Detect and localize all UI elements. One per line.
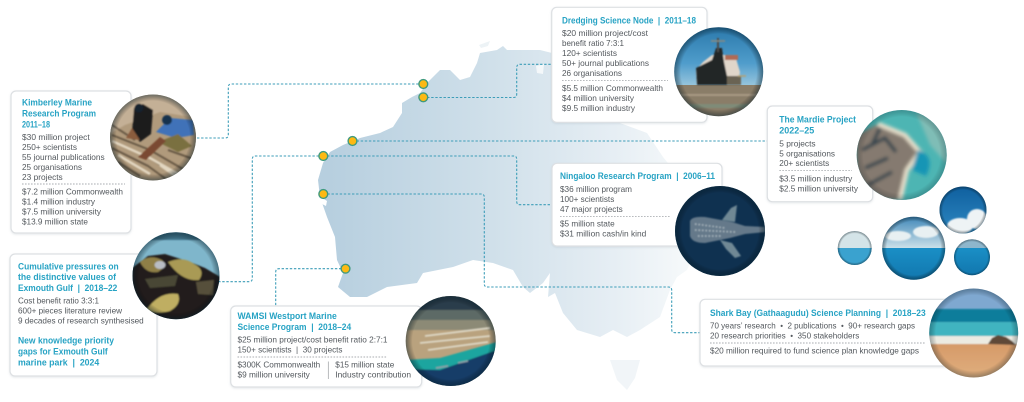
heading: Shark Bay: Shark Bay (Gathaagudu) Science Planning | 2018–23 bbox=[710, 308, 926, 318]
funding: Mardie: $2.5 million university bbox=[779, 183, 859, 193]
connector: WAMSI Westport bbox=[276, 269, 346, 306]
stats: WAMSI: $25 million project/cost benefit ratio 2:7:1 bbox=[238, 335, 388, 345]
connector: Mardie bbox=[352, 140, 767, 142]
stats: Mardie: 5 projects bbox=[779, 139, 816, 149]
heading: WAMSI: Science Program | 2018–24 bbox=[238, 322, 351, 332]
funding: WAMSI left: $300K Commonwealth bbox=[238, 359, 321, 369]
funding: Shark Bay: $20 million required to fund science plan knowledge gaps bbox=[710, 346, 919, 356]
stats: Mardie: 20+ scientists bbox=[779, 158, 829, 168]
panel: WAMSI Westport Marine Science Program bbox=[231, 306, 422, 387]
funding: Ningaloo: $31 million cash/in kind bbox=[560, 229, 647, 239]
map pins bbox=[319, 80, 428, 273]
photo: Shark Bay beach bbox=[928, 288, 1020, 380]
connector: Ningaloo bbox=[323, 156, 552, 205]
stats: Kimberley: 25 organisations bbox=[22, 162, 82, 172]
stats: Ningaloo: 100+ scientists bbox=[560, 194, 614, 204]
heading: Kimberley: Kimberley Marine bbox=[22, 98, 92, 108]
heading: Mardie: The Mardie Project bbox=[779, 115, 856, 125]
stats: Mardie: 5 organisations bbox=[779, 148, 835, 158]
photo: small ocean circle bbox=[838, 231, 872, 265]
photo: researchers on the reef bbox=[110, 94, 196, 180]
stats: Cumulative pressures: 9 decades of research synthesised bbox=[18, 315, 144, 325]
stats: Kimberley: 250+ scientists bbox=[22, 142, 77, 152]
connector: Exmouth Gulf bbox=[218, 156, 323, 282]
heading: New knowledge priority gaps: marine park | 2024 bbox=[18, 357, 99, 367]
stats: Kimberley: 23 projects bbox=[22, 172, 63, 182]
heading: Cumulative pressures: Exmouth Gulf | 2018–22 bbox=[18, 283, 117, 293]
panel: Kimberley Marine Research Program bbox=[11, 91, 131, 233]
connector: Dredging Science Node bbox=[423, 64, 552, 98]
panel: Shark Bay Science Planning bbox=[700, 299, 955, 366]
stats: Shark Bay: 20 research priorities • 350 stakeholders bbox=[710, 331, 859, 341]
funding: Kimberley: $7.2 million Commonwealth bbox=[22, 187, 123, 197]
funding: Kimberley: $7.5 million university bbox=[22, 207, 102, 217]
heading: New knowledge priority gaps: New knowledge priority bbox=[18, 336, 114, 346]
photo: whale shark bbox=[674, 185, 766, 277]
heading: Kimberley: Research Program bbox=[22, 109, 96, 119]
funding: Dredging: $4 million university bbox=[562, 93, 635, 103]
heading: WAMSI: WAMSI Westport Marine bbox=[238, 311, 337, 321]
heading: New knowledge priority gaps: gaps for Exmouth Gulf bbox=[18, 346, 109, 356]
heading: Mardie: 2022–25 bbox=[779, 126, 814, 136]
heading: Ningaloo: Ningaloo Research Program | 2006–11 bbox=[560, 171, 715, 181]
stats: Dredging: 26 organisations bbox=[562, 68, 622, 78]
funding: WAMSI left: $9 million university bbox=[238, 369, 311, 379]
stats: Shark Bay: 70 years’ research • 2 publications • 90+ research gaps bbox=[710, 321, 915, 331]
panel: The Mardie Project bbox=[767, 106, 873, 202]
stats: Ningaloo: $36 million program bbox=[560, 184, 632, 194]
map of Australia bbox=[316, 41, 700, 390]
funding: Mardie: $3.5 million industry bbox=[779, 173, 853, 183]
heading: Cumulative pressures: the distinctive values of bbox=[18, 272, 117, 282]
heading: Cumulative pressures: Cumulative pressures on bbox=[18, 261, 119, 271]
funding: Kimberley: $13.9 million state bbox=[22, 217, 88, 227]
panel: Cumulative pressures on Exmouth Gulf bbox=[10, 254, 157, 376]
funding: Dredging: $9.5 million industry bbox=[562, 103, 636, 113]
funding: Kimberley: $1.4 million industry bbox=[22, 197, 96, 207]
photo: dark ocean circle bbox=[953, 239, 991, 276]
connector: Shark Bay bbox=[323, 194, 700, 333]
stats: Dredging: 50+ journal publications bbox=[562, 58, 649, 68]
funding: Ningaloo: $5 million state bbox=[560, 219, 615, 229]
stats: Dredging: $20 million project/cost bbox=[562, 28, 649, 38]
stats: WAMSI: 150+ scientists | 30 projects bbox=[238, 345, 342, 355]
stats: Kimberley: $30 million project bbox=[22, 132, 90, 142]
heading: Dredging: Dredging Science Node | 2011–18 bbox=[562, 16, 696, 26]
stats: Ningaloo: 47 major projects bbox=[560, 204, 623, 214]
funding: WAMSI right: $15 million state bbox=[335, 359, 395, 369]
photo: sky and cloud circle bbox=[940, 186, 986, 234]
funding: WAMSI right: Industry contribution bbox=[335, 369, 411, 379]
panel: Dredging Science Node bbox=[552, 7, 707, 122]
stats: Dredging: benefit ratio 7:3:1 bbox=[562, 38, 624, 48]
funding: Dredging: $5.5 million Commonwealth bbox=[562, 83, 663, 93]
stats: Cumulative pressures: 600+ pieces literature review bbox=[18, 305, 123, 315]
heading: Kimberley: 2011–18 bbox=[22, 120, 50, 130]
photo: coastal port aerial bbox=[405, 295, 497, 387]
photo: large ocean circle bbox=[881, 216, 947, 281]
stats: Dredging: 120+ scientists bbox=[562, 48, 617, 58]
connector: Kimberley bbox=[197, 84, 423, 138]
photo: dredging ship bbox=[674, 27, 764, 117]
photo: coral bbox=[132, 232, 222, 320]
photo: Mardie coastline aerial bbox=[856, 109, 948, 201]
panel: Ningaloo Research Program bbox=[552, 163, 722, 246]
stats: Kimberley: 55 journal publications bbox=[22, 152, 105, 162]
stats: Cumulative pressures: Cost benefit ratio 3:3:1 bbox=[18, 295, 99, 305]
